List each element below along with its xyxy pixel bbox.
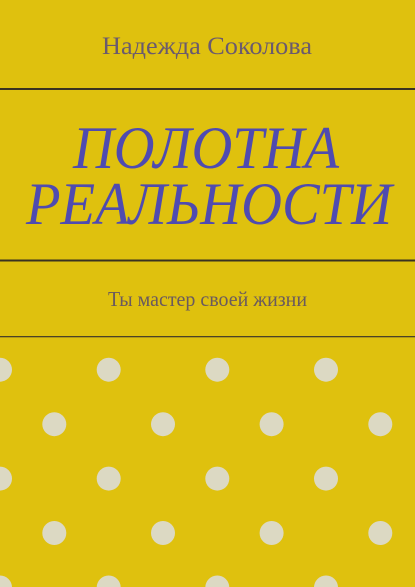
polka dot pattern <box>0 358 392 587</box>
title: РЕАЛЬНОСТИ <box>25 171 395 237</box>
title: ПОЛОТНА <box>72 115 339 181</box>
title <box>25 115 395 237</box>
author name: Надежда Соколова <box>102 33 312 60</box>
subtitle: Ты мастер своей жизни <box>108 287 307 311</box>
